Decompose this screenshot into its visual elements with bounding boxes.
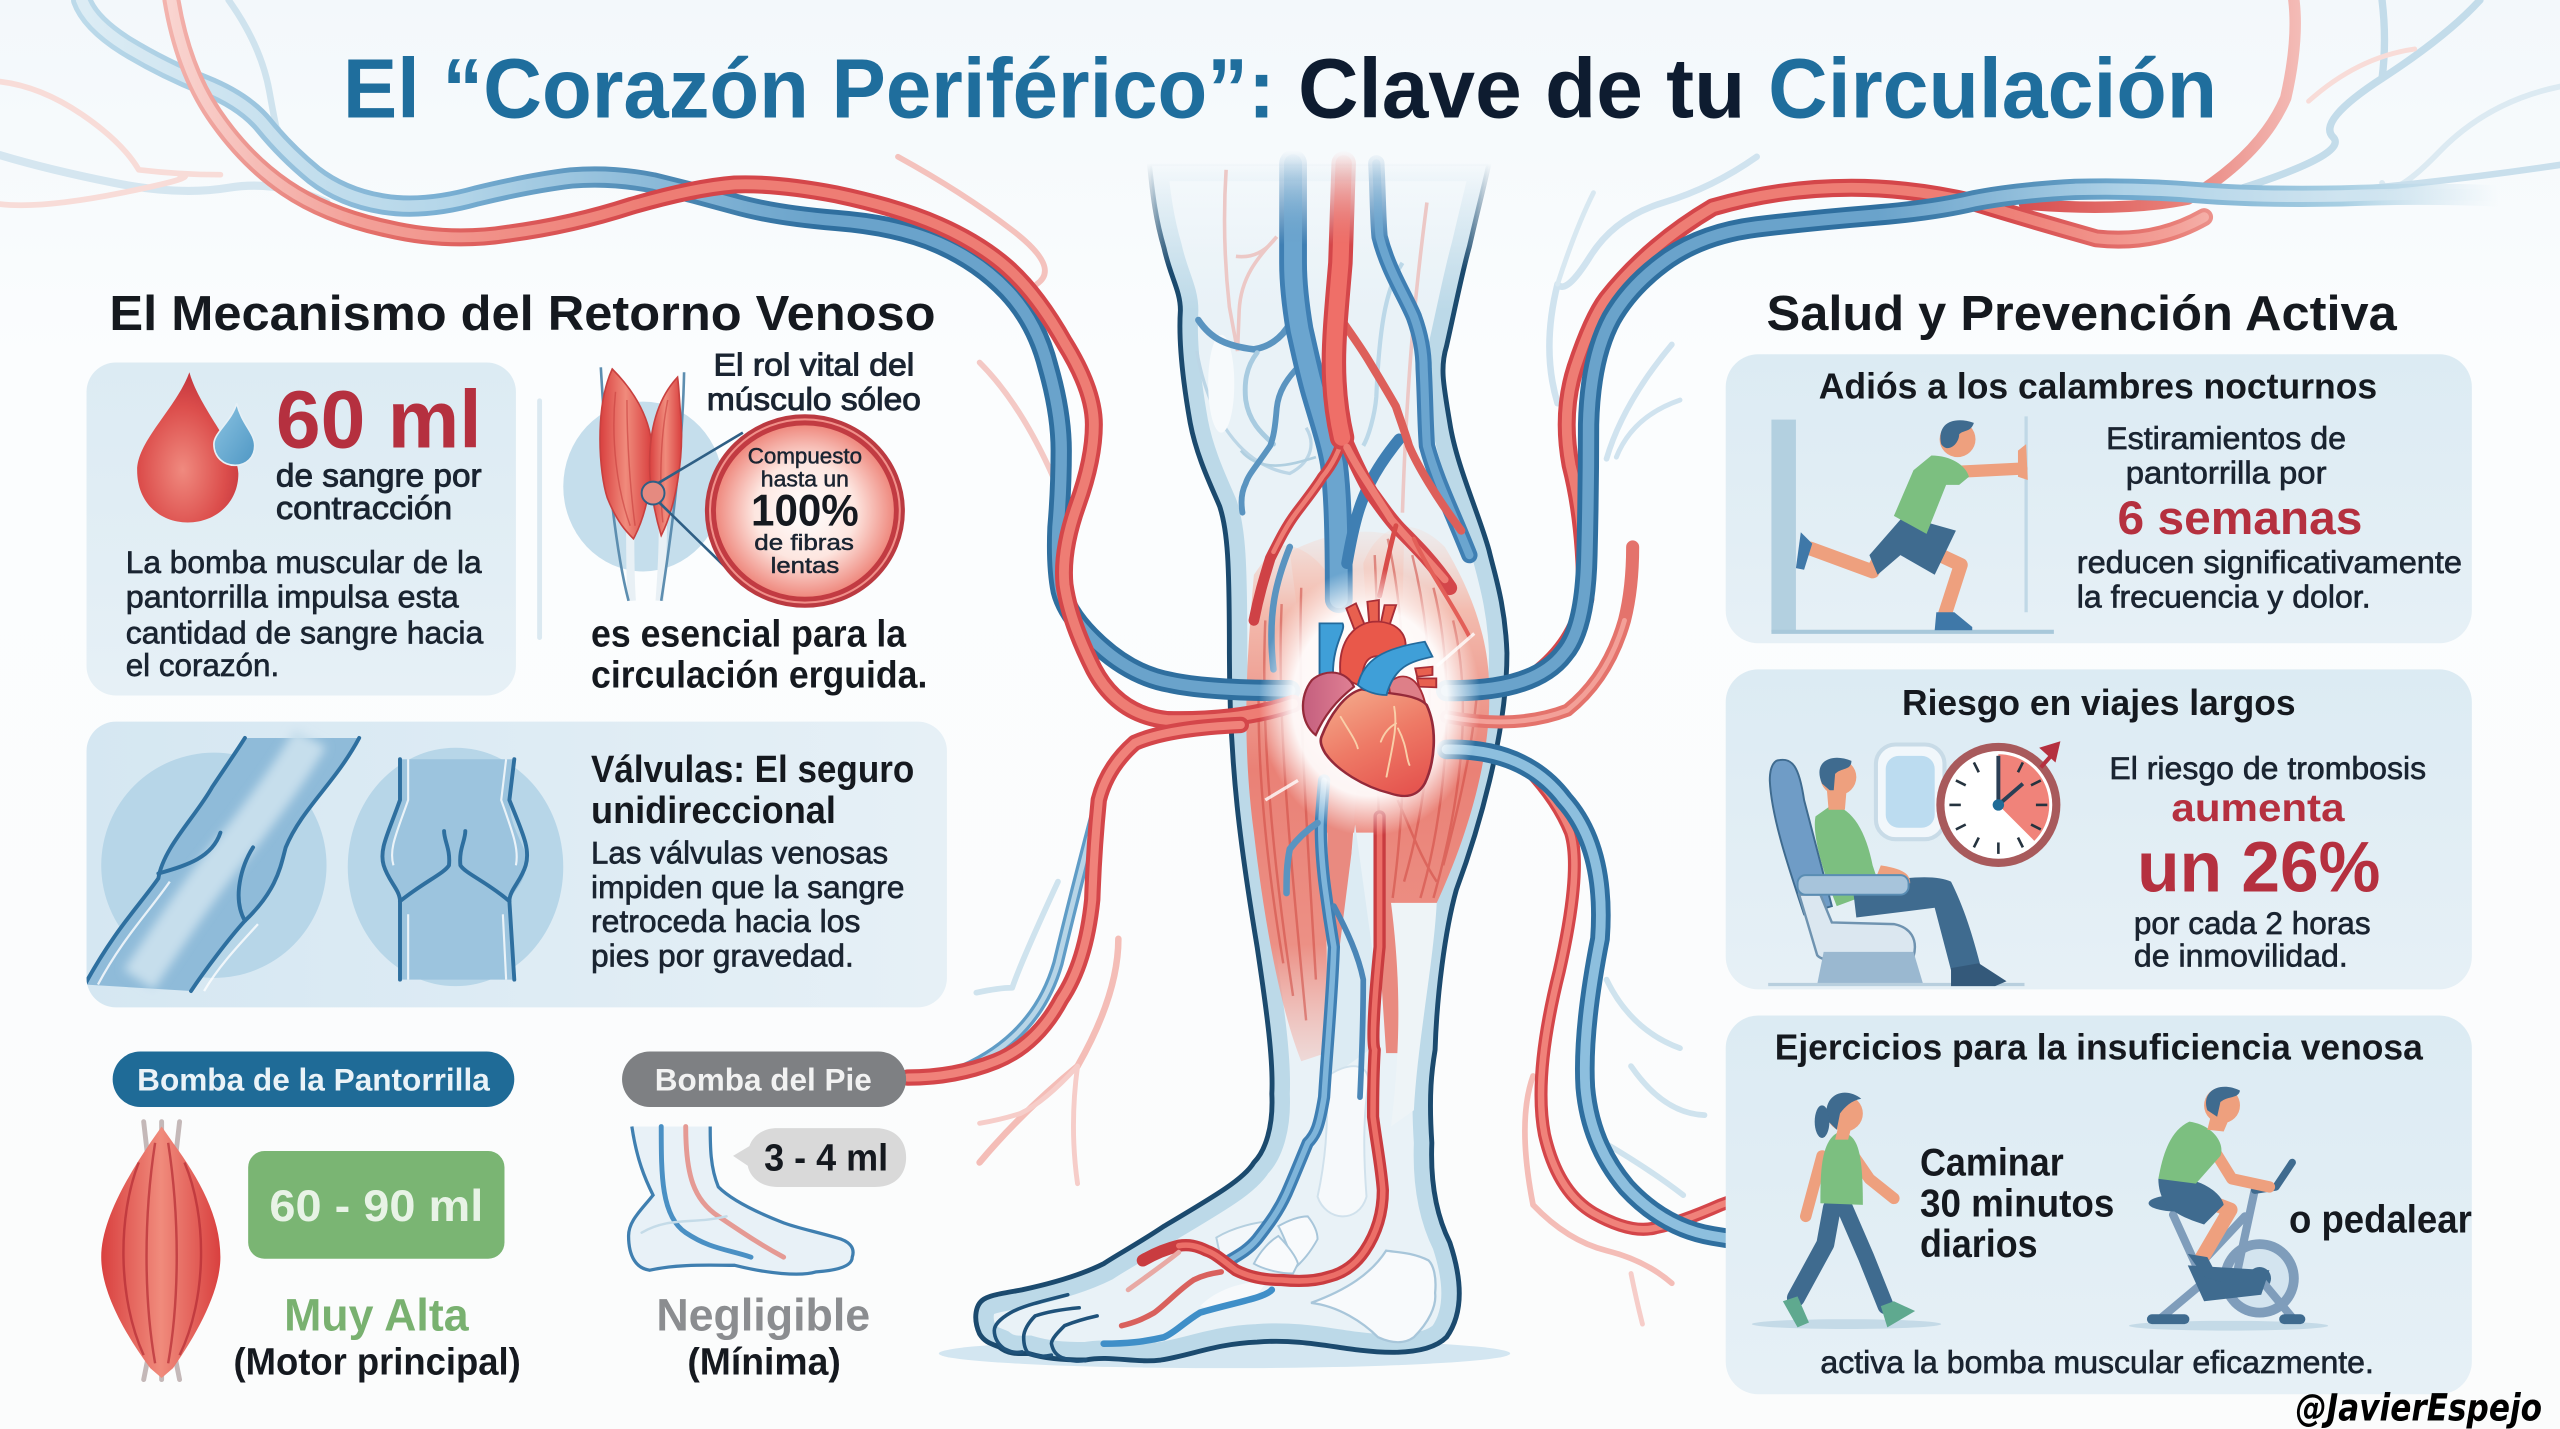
Achilles tendon — [1332, 824, 1372, 1072]
right atrium — [1388, 676, 1426, 705]
stat caption: de sangre por — [276, 457, 482, 494]
muscle fibres — [1259, 539, 1478, 1020]
faint knee vessels — [1224, 170, 1427, 513]
description: por cada 2 horas — [2134, 906, 2371, 941]
valve circles and veins — [85, 738, 563, 991]
stat: 6 semanas: 6 semanas — [2118, 492, 2362, 545]
calf heads — [600, 369, 652, 539]
description: La bomba muscular de la — [126, 545, 482, 580]
valve description: pies por gravedad. — [591, 939, 854, 974]
panel: 60 ml per contraction — [87, 362, 516, 696]
calf muscle left head — [1246, 546, 1327, 1062]
icon: blood drop — [137, 372, 238, 522]
toes — [994, 1295, 1097, 1361]
heading: right column: Salud y Prevención Activa — [1767, 287, 2398, 341]
panel heading: Ejercicios para la insuficiencia venosa — [1775, 1027, 2424, 1068]
pulmonary trunk — [1358, 642, 1432, 695]
pill label: Bomba de la Pantorrilla — [137, 1062, 490, 1098]
soleus title — [707, 348, 921, 417]
vessels: lower right branch to exercise panel — [1447, 749, 1763, 1324]
description: El riesgo de trombosis — [2109, 751, 2426, 786]
icon: water drop — [214, 403, 255, 465]
ventricle — [1321, 689, 1434, 796]
magnifier text: hasta un — [761, 467, 849, 492]
valve description: retroceda hacia los — [591, 904, 860, 939]
walking text: 30 minutos — [1920, 1182, 2114, 1225]
great arteries — [1346, 600, 1436, 687]
comparison: calf pump — [101, 1051, 521, 1383]
soleus title: El rol vital del — [713, 348, 914, 383]
description — [126, 545, 484, 683]
back and front legs — [1811, 549, 1961, 616]
icon: clock — [1936, 741, 2060, 867]
backdrop circle — [563, 402, 723, 571]
outline band — [976, 163, 1507, 1361]
pedalling text: o pedalear — [2289, 1199, 2472, 1242]
arm — [1956, 469, 2021, 472]
stat bubble: 3 - 4 ml — [764, 1137, 888, 1179]
panel: night cramps — [1726, 354, 2472, 643]
heel bone — [1311, 1251, 1436, 1342]
pill label — [622, 1051, 906, 1107]
callout lines — [658, 433, 743, 571]
stat bubble — [733, 1128, 906, 1187]
soleus caption — [591, 613, 927, 695]
description: reducen significativamente — [2077, 545, 2462, 580]
panel: exercises — [1726, 1016, 2472, 1394]
tendons — [630, 526, 663, 601]
superior vena cava — [1320, 623, 1343, 675]
talus bone — [1278, 1216, 1318, 1267]
window pane — [1886, 756, 1935, 828]
valve title: Válvulas: El seguro — [591, 748, 914, 790]
calf muscle right head — [1363, 527, 1489, 911]
heading: left column: El Mecanismo del Retorno Venoso — [109, 287, 936, 341]
stat: aumenta: aumenta — [2171, 787, 2346, 830]
icon: foot — [629, 1127, 853, 1274]
main title: Circulación — [1768, 41, 2217, 136]
panel: valves — [85, 722, 947, 1007]
valve description — [591, 836, 904, 974]
walking text: diarios — [1920, 1223, 2038, 1266]
torso — [1894, 456, 1969, 534]
main title: Clave de tu — [1298, 41, 1745, 136]
midfoot bone — [1254, 1236, 1298, 1273]
valve description: Las válvulas venosas — [591, 836, 888, 871]
pill label: Bomba del Pie — [655, 1062, 872, 1098]
stat: 60 ml: 60 ml — [276, 374, 482, 465]
lower leg vein — [1229, 780, 1334, 1260]
centre muscle strip — [1327, 832, 1398, 1054]
pill label — [113, 1051, 514, 1107]
soleus muscle illustration — [563, 348, 927, 695]
description — [2109, 751, 2426, 974]
lower leg and foot artery — [1143, 816, 1383, 1281]
stat badge: 60 - 90 ml — [269, 1182, 483, 1231]
stat caption: contracción — [276, 489, 452, 526]
glow — [1259, 568, 1481, 836]
description: de inmovilidad. — [2134, 939, 2348, 974]
comparison: foot pump — [622, 1051, 906, 1383]
magnifier text: de fibras — [754, 530, 854, 555]
description: cantidad de sangre hacia — [126, 615, 484, 650]
central leg and foot anatomy — [939, 163, 1510, 1368]
soleus title: músculo sóleo — [707, 382, 921, 417]
rating note: (Motor principal) — [233, 1341, 521, 1383]
icon: walking woman — [1752, 1093, 1941, 1329]
leg silhouette — [976, 163, 1507, 1361]
icon: calf stretch against wall — [1771, 416, 2054, 632]
coronary vessels — [1341, 707, 1409, 777]
heart with glow — [1259, 568, 1481, 836]
tibia — [1318, 1066, 1368, 1216]
central veins — [1104, 163, 1469, 1344]
panel heading: Riesgo en viajes largos — [1902, 682, 2296, 723]
walking text: Caminar — [1920, 1142, 2064, 1185]
magnifier text: Compuesto — [748, 444, 862, 469]
rating note: (Mínima) — [687, 1341, 841, 1383]
rating: Negligible — [656, 1290, 870, 1341]
icon: airplane window — [1876, 744, 1944, 839]
description: pantorrilla por — [2126, 455, 2327, 490]
icon: calf muscle — [101, 1122, 220, 1380]
stat: 100%: 100% — [751, 487, 859, 536]
magnifier text — [748, 444, 862, 578]
valve title — [591, 748, 914, 831]
vessels: lower left branch to foot pump pill — [908, 725, 1241, 1184]
walking text — [1920, 1142, 2114, 1266]
glow rays — [1265, 633, 1474, 800]
aorta — [1340, 622, 1406, 687]
description: el corazón. — [126, 648, 279, 683]
valve title: unidireccional — [591, 789, 836, 831]
foot shadow — [939, 1339, 1510, 1368]
head — [1940, 421, 1976, 457]
description: Estiramientos de — [2106, 421, 2346, 456]
icon: cyclist on stationary bike — [2129, 1087, 2328, 1331]
backdrop circles — [101, 753, 327, 978]
panel heading: Adiós a los calambres nocturnos — [1819, 365, 2377, 406]
magnifier circle — [707, 416, 903, 606]
description: pantorrilla impulsa esta — [126, 579, 460, 614]
stat badge — [248, 1151, 504, 1259]
panel conclusion: activa la bomba muscular eficazmente. — [1820, 1345, 2374, 1380]
icon: seated passenger — [1768, 758, 2024, 986]
callout dot — [642, 482, 664, 504]
muscle fibres — [614, 392, 668, 526]
leg outline — [976, 163, 1507, 1361]
soleus caption: es esencial para la — [591, 613, 907, 655]
panel: long trips — [1726, 669, 2472, 989]
open valve vein — [85, 738, 359, 991]
main title — [343, 41, 2217, 136]
description: la frecuencia y dolor. — [2077, 579, 2371, 614]
closed valve vein — [382, 759, 527, 980]
main title: El “Corazón Periférico”: — [343, 41, 1275, 136]
vessels: upper left arteries and veins — [0, 0, 1293, 720]
vessels: upper right arteries and veins — [1447, 0, 2560, 722]
stat: un 26%: un 26% — [2137, 827, 2380, 907]
magnifier text: lentas — [771, 553, 839, 578]
shoes — [1935, 612, 1972, 630]
left atrium — [1303, 673, 1354, 735]
calf muscle centre fill — [1290, 532, 1404, 833]
rating: Muy Alta — [284, 1290, 469, 1341]
metatarsal bones — [1215, 1221, 1263, 1255]
soleus caption: circulación erguida. — [591, 653, 927, 695]
shorts — [1869, 516, 1956, 575]
knee contour — [1197, 351, 1311, 473]
description — [2077, 421, 2462, 614]
valve description: impiden que la sangre — [591, 870, 904, 905]
stat caption — [276, 457, 482, 526]
